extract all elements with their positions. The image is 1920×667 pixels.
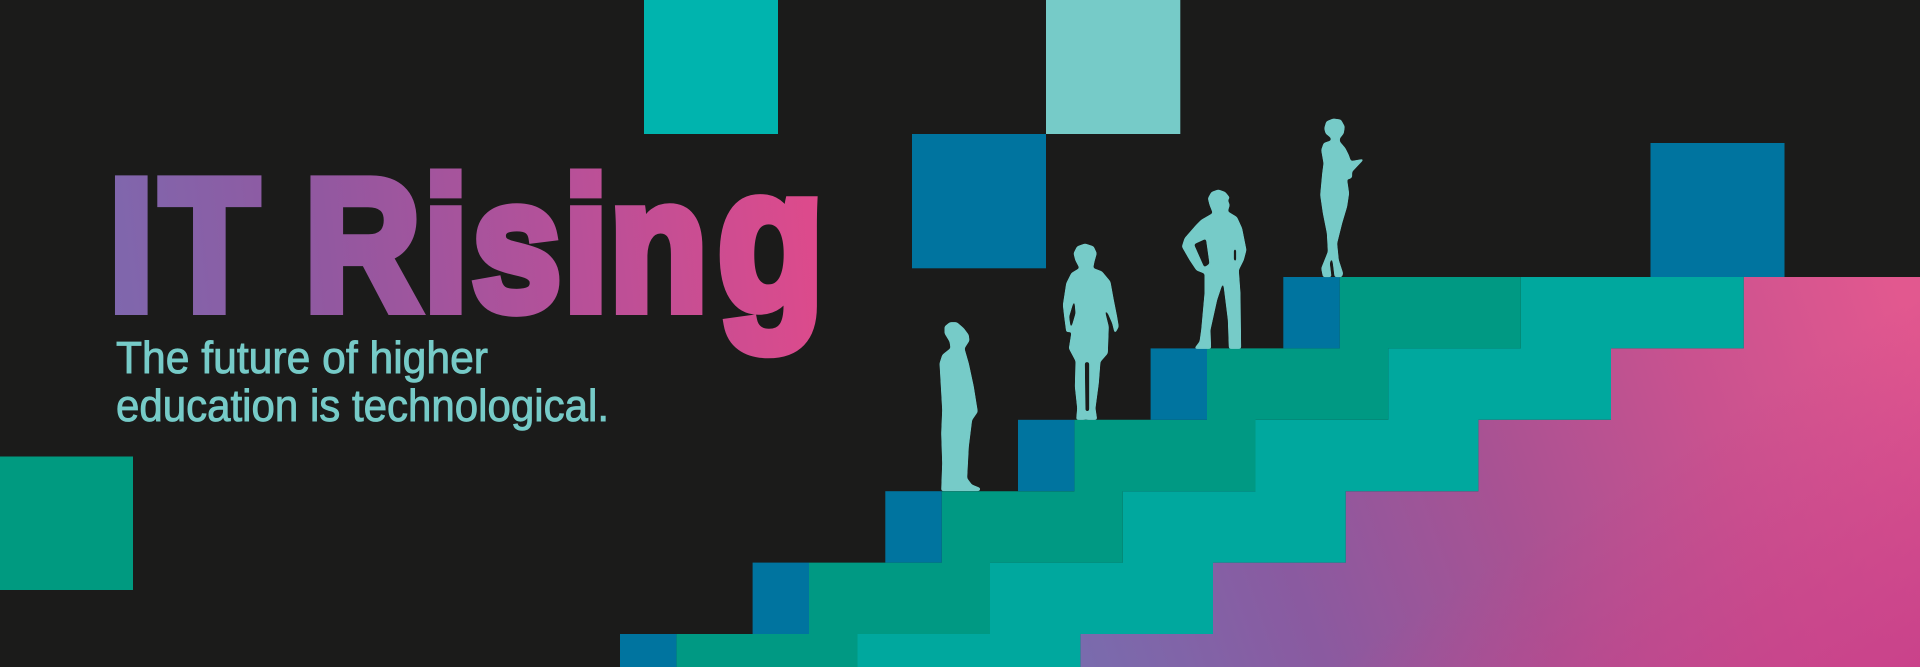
floating square: blue right	[1650, 143, 1784, 277]
silhouette: man hands on hips	[1182, 190, 1246, 348]
floating square: green left	[0, 456, 133, 590]
stair layer: pink gradient	[1080, 277, 1920, 667]
subtitle	[116, 332, 609, 431]
stair layer: teal	[858, 277, 1744, 667]
staircase	[620, 277, 1920, 667]
stair layer: blue risers	[620, 277, 1340, 667]
floating square: blue centre	[912, 134, 1046, 268]
silhouette: woman with tablet	[1321, 119, 1363, 277]
subtitle line 1: The future of higher	[116, 332, 488, 383]
subtitle line 2: education is technological.	[116, 380, 609, 431]
silhouette: woman in dress	[1063, 244, 1118, 419]
people silhouettes	[940, 119, 1363, 491]
stair layer: green	[676, 277, 1521, 667]
silhouette: man looking up, lower step	[940, 323, 980, 491]
floating square: teal top	[644, 0, 778, 134]
floating square: light teal top	[1046, 0, 1180, 134]
title: IT Risin	[109, 140, 708, 350]
title: g	[717, 126, 824, 354]
